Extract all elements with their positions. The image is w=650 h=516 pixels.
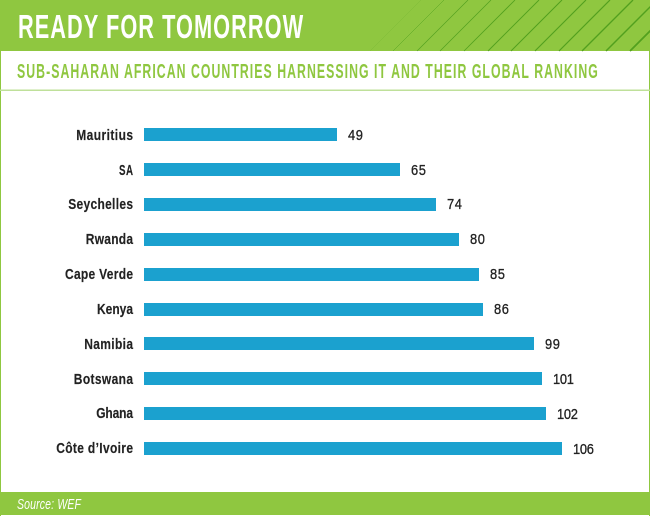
row: Mauritius: 49 — [348, 126, 363, 143]
row: Mauritius — [76, 126, 363, 143]
row: Botswana: Botswana — [74, 371, 133, 387]
row: Ghana: 102 — [557, 405, 578, 422]
row: Seychelles — [68, 195, 462, 212]
row: Cape Verde — [65, 265, 505, 282]
row: Namibia: 99 — [545, 335, 560, 352]
subtitle: SUB-SAHARAN AFRICAN COUNTRIES HARNESSING IT AND THEIR GLOBAL RANKING — [17, 60, 598, 83]
title: READY FOR TOMORROW — [18, 8, 304, 45]
row: Namibia: Namibia — [84, 336, 133, 352]
row: SA: 65 — [411, 161, 426, 178]
row: Ghana: Ghana — [96, 405, 133, 421]
row: Botswana: 101 — [553, 370, 574, 387]
row: SA: SA — [119, 162, 133, 179]
row: SA — [119, 161, 426, 179]
row: Seychelles: Seychelles — [68, 196, 133, 212]
row: Kenya: Kenya — [97, 301, 133, 317]
row: Botswana — [74, 370, 574, 387]
header band — [0, 0, 650, 51]
row: Côte d'Ivoire: Côte d’Ivoire — [56, 440, 133, 456]
source note: Source: WEF — [17, 495, 82, 512]
row: Mauritius: Mauritius — [76, 127, 133, 143]
row: Côte d'Ivoire: 106 — [573, 440, 594, 457]
row: Côte d'Ivoire — [56, 440, 594, 457]
row: Seychelles: 74 — [447, 195, 462, 212]
bar chart — [56, 126, 594, 457]
row: Cape Verde: Cape Verde — [65, 266, 133, 282]
row: Kenya — [97, 300, 509, 317]
row: Namibia — [84, 335, 560, 352]
row: Kenya: 86 — [494, 300, 509, 317]
row: Ghana — [96, 405, 578, 422]
row: Rwanda: 80 — [470, 230, 485, 247]
row: Cape Verde: 85 — [490, 265, 505, 282]
row: Rwanda: Rwanda — [86, 231, 133, 247]
row: Rwanda — [86, 230, 485, 247]
footer band — [0, 492, 650, 515]
